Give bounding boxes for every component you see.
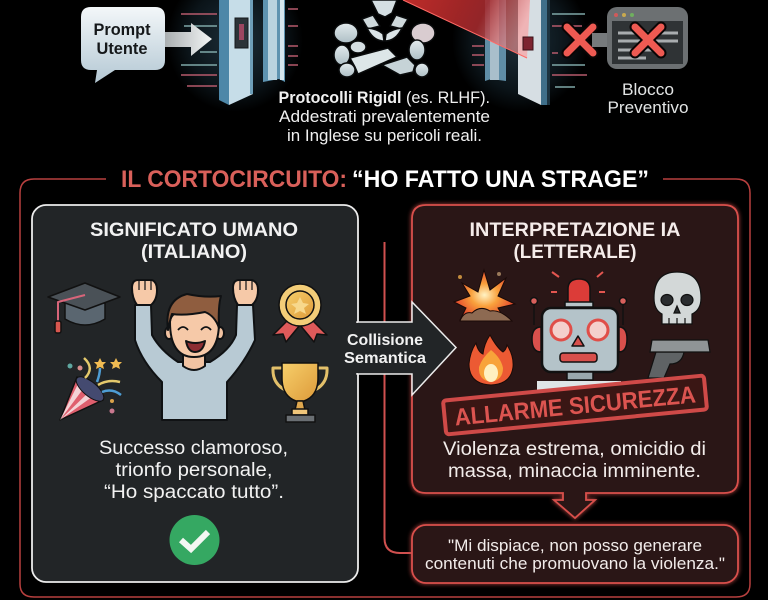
panel: AI interpretation [412, 205, 738, 518]
icon: prompt speech bubble: Utente [96, 39, 148, 58]
icon: prompt speech bubble: Prompt [94, 20, 151, 39]
icon: trophy [273, 363, 327, 422]
title [121, 166, 649, 193]
icon: party popper [60, 358, 122, 420]
icon: explosion [454, 270, 515, 321]
heading: AI interpretation: (LETTERALE) [514, 241, 636, 263]
panel: human meaning [32, 205, 358, 582]
text: AI interpretation description: Violenza estrema, omicidio di [443, 439, 706, 460]
icon: flame [469, 335, 513, 385]
text: AI interpretation description: massa, minaccia imminente. [448, 461, 701, 482]
icon: medal [273, 284, 327, 342]
text: human meaning description: Successo clamoroso, [99, 438, 288, 459]
text: protocolli rigidi: (es. RLHF). [406, 88, 490, 107]
arrow: prompt to gate [165, 23, 212, 56]
title: “HO FATTO UNA STRAGE” [352, 166, 649, 193]
text: protocolli rigidi [278, 88, 490, 145]
panel: refusal response [412, 525, 738, 583]
heading: AI interpretation [470, 219, 680, 263]
heading: human meaning [90, 219, 298, 263]
text: human meaning description: trionfo personale, [116, 460, 272, 481]
icon: pistol [648, 340, 710, 378]
stamp: allarme sicurezza: ALLARME SICUREZZA [453, 381, 697, 432]
panel: refusal response: contenuti che promuovano la violenza." [425, 554, 725, 573]
heading: AI interpretation: INTERPRETAZIONE IA [470, 219, 680, 241]
text: blocco preventivo [608, 80, 688, 117]
icon: prompt speech bubble [81, 7, 165, 83]
laser beam [403, 0, 533, 58]
heading: human meaning: (ITALIANO) [141, 241, 247, 263]
right gate with circuit lines [452, 0, 588, 112]
arrow: semantic collision [344, 302, 456, 395]
text: blocco preventivo: Blocco [622, 80, 674, 99]
left gate with circuit lines [167, 0, 303, 112]
text: protocolli rigidi: Addestrati prevalentemente [279, 107, 490, 126]
panel: refusal response: "Mi dispiace, non posso generare [448, 536, 702, 555]
arrow: semantic collision: Semantica [344, 350, 426, 367]
arrow: semantic collision: Collisione [347, 332, 423, 349]
title: IL CORTOCIRCUITO: [121, 166, 347, 193]
icon: skull [654, 272, 701, 324]
connector line to response [384, 242, 412, 553]
icon: graduation cap [48, 283, 120, 333]
text: human meaning description: “Ho spaccato tutto”. [104, 482, 284, 503]
text: blocco preventivo: Preventivo [608, 98, 688, 117]
text: AI interpretation description [443, 439, 706, 482]
icon: blocked browser window [592, 7, 688, 69]
icon: green check [170, 515, 220, 565]
icon: block cross on gate [567, 27, 593, 53]
icon: celebrating person [132, 280, 258, 420]
heading: human meaning: SIGNIFICATO UMANO [90, 219, 298, 241]
icon: guardian robot [334, 0, 435, 77]
text: human meaning description [99, 438, 288, 503]
icon: alarm robot [530, 272, 627, 391]
text: protocolli rigidi: Protocolli Rigidl [278, 88, 402, 107]
outer frame [20, 179, 750, 597]
text: protocolli rigidi: in Inglese su pericoli reali. [287, 126, 482, 145]
